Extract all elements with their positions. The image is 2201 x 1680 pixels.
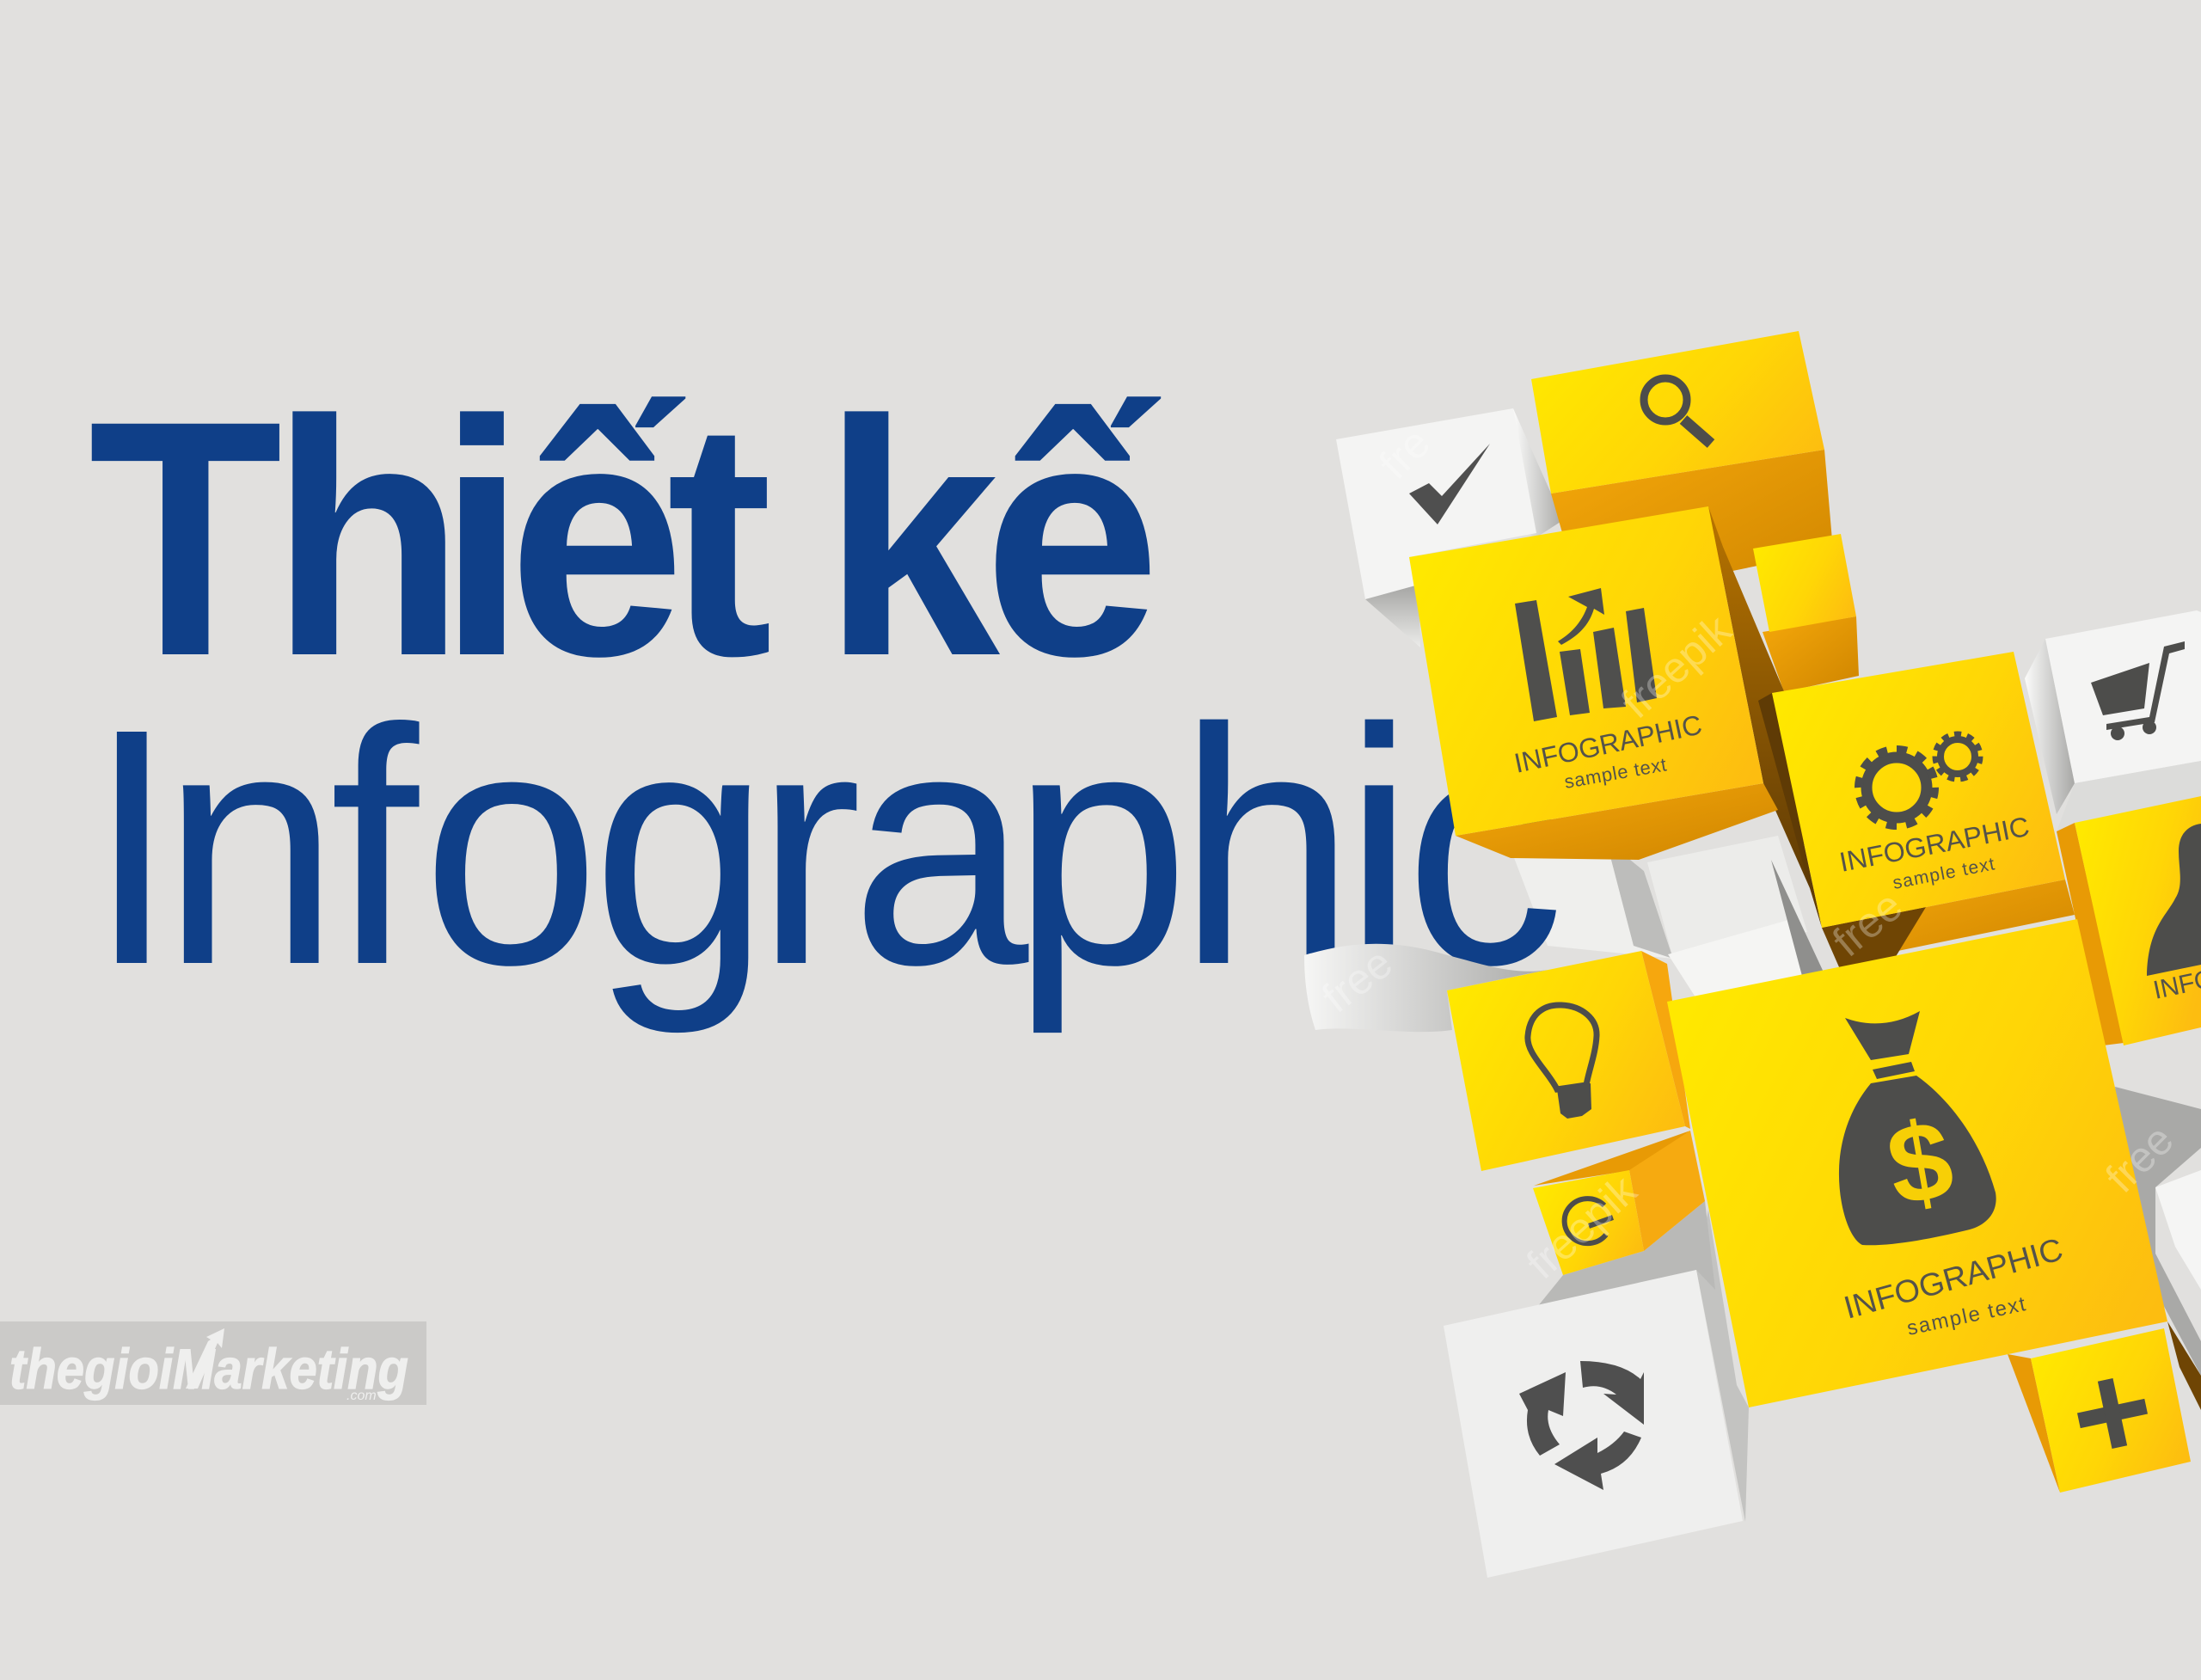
title line 2: Infographic	[88, 659, 1565, 1037]
logo suffix: .com	[346, 1389, 377, 1403]
label: sample text: sample text	[1905, 1292, 2028, 1340]
icon: money bag	[1839, 1011, 1996, 1245]
cube: person	[2057, 796, 2201, 1045]
icon: magnifier	[1644, 378, 1711, 444]
icon: recycle arrows	[1519, 1361, 1644, 1490]
cube: plus	[2008, 1321, 2201, 1493]
icon: bar chart	[1515, 588, 1657, 721]
logo: thegioiMarketing	[0, 1321, 426, 1405]
white fading band over title base	[1304, 944, 1548, 1032]
freepik watermarks: free	[1313, 938, 1401, 1022]
freepik watermarks: free	[2096, 1115, 2183, 1202]
label: infographic: INFOGRAPHIC	[1511, 708, 1705, 779]
freepik watermarks	[1313, 419, 2183, 1288]
cube: search	[1531, 331, 1833, 602]
label: sample text: sample text	[1891, 854, 1996, 893]
freepik watermarks: freepik	[1612, 604, 1741, 727]
icon: person silhouette	[2147, 824, 2201, 976]
white cubes behind the title	[1336, 408, 2201, 1522]
icon: check mark	[1409, 444, 1490, 524]
icon: plus	[2072, 1373, 2153, 1454]
cube: bulb	[1447, 951, 1690, 1171]
cube: money bag	[1667, 919, 2167, 1407]
freepik watermarks: fre	[1370, 419, 1439, 488]
label: infographic: INFOGRAPHIC	[1840, 1231, 2067, 1326]
label: infographic: INFOGRAPHIC	[1836, 811, 2032, 878]
icon: shopping cart	[2091, 641, 2185, 740]
label: sample text: sample text	[1563, 753, 1668, 793]
logo arrow	[186, 1328, 224, 1389]
cube: chart	[1409, 506, 1810, 888]
cube: check	[1409, 444, 1490, 524]
title	[88, 351, 1565, 1037]
icon: bulb	[1528, 1005, 1597, 1119]
freepik watermarks: freepik	[1517, 1165, 1646, 1288]
cube: small back	[1753, 534, 1859, 692]
cube: power	[1533, 1131, 1705, 1275]
icon: power	[1565, 1199, 1613, 1243]
icon: money bag: $	[1879, 1095, 1961, 1229]
freepik watermarks: free	[1824, 881, 1911, 966]
cube: gears	[1758, 652, 2075, 1006]
logo wordmark: thegioiMarketing	[9, 1337, 408, 1401]
cube: recycle	[1444, 1270, 1743, 1578]
title line 1: Thiết kế	[89, 351, 1162, 726]
icon: gears	[1859, 734, 1980, 825]
